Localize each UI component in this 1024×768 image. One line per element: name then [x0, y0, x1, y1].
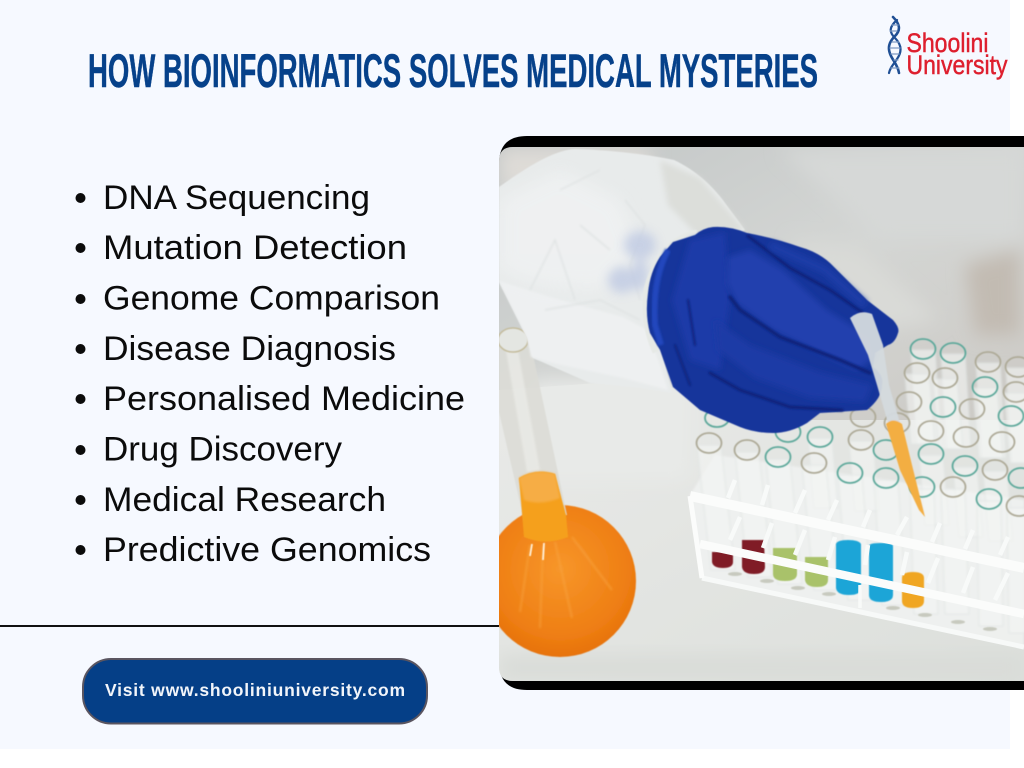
list item: Drug Discovery: Drug Discovery — [103, 430, 343, 468]
logo: Shoolini University: University — [906, 50, 1008, 80]
pipette clear barrel — [850, 312, 900, 423]
mottled blue gather on cuff — [608, 231, 656, 293]
list item: Predictive Genomics: Predictive Genomics — [103, 531, 431, 569]
orange liquid tube — [902, 572, 924, 608]
list item: Disease Diagnosis: Disease Diagnosis — [103, 330, 396, 368]
list item: Medical Research: Medical Research — [103, 481, 386, 519]
green liquid tubes — [773, 548, 828, 587]
orange liquid in neck — [519, 472, 568, 542]
logo wordmark: Shoolini — [906, 28, 988, 58]
back-of-hand highlight — [672, 232, 730, 370]
test tube rack and tubes — [690, 339, 1024, 647]
rack body fill — [690, 455, 1024, 647]
rack front rails — [690, 496, 1024, 647]
list item: Genome Comparison: Genome Comparison — [103, 280, 440, 318]
upper finger sheen — [770, 245, 865, 305]
divider line — [0, 625, 500, 627]
main finger — [727, 250, 875, 370]
photo: gloved hand pipetting into test tubes — [484, 147, 1024, 681]
protective sleeve cuff — [499, 149, 745, 393]
list item: Personalised Medicine: Personalised Medicine — [103, 380, 465, 418]
smooth upper cuff panel — [661, 162, 742, 232]
blue liquid tubes — [836, 540, 893, 602]
list item: Mutation Detection: Mutation Detection — [103, 229, 407, 267]
button: visit website — [83, 659, 427, 724]
coloured liquids — [712, 540, 924, 608]
tube rims — [696, 339, 1024, 516]
table surface — [499, 380, 1024, 681]
finger creases — [675, 236, 870, 410]
cuff crease lines — [554, 240, 556, 244]
bullet list — [76, 179, 465, 569]
logo: Shoolini University — [889, 17, 1008, 80]
list item: DNA Sequencing: DNA Sequencing — [103, 179, 370, 217]
tube bodies — [700, 349, 1024, 497]
pipette — [850, 312, 925, 517]
photo frame — [499, 136, 1024, 690]
glove silhouette — [647, 227, 898, 433]
glass flask with orange liquid — [484, 328, 636, 657]
blue nitrile glove — [647, 227, 898, 433]
flask bulb — [484, 505, 636, 657]
pipette orange liquid — [886, 420, 925, 517]
button: visit website: Visit www.shooliniuniversity.com — [105, 680, 405, 700]
cuff opening fold — [655, 250, 668, 345]
gown background — [499, 147, 1024, 447]
rack dividers — [728, 480, 1008, 608]
rack base holes — [728, 572, 997, 631]
flask rim — [498, 328, 528, 352]
lower fingers — [725, 332, 868, 400]
red liquid tubes — [712, 540, 765, 574]
flask neck — [499, 345, 567, 520]
elastic cuff edge — [644, 273, 654, 352]
flask highlights — [520, 537, 612, 628]
icon: DNA helix — [889, 17, 901, 73]
